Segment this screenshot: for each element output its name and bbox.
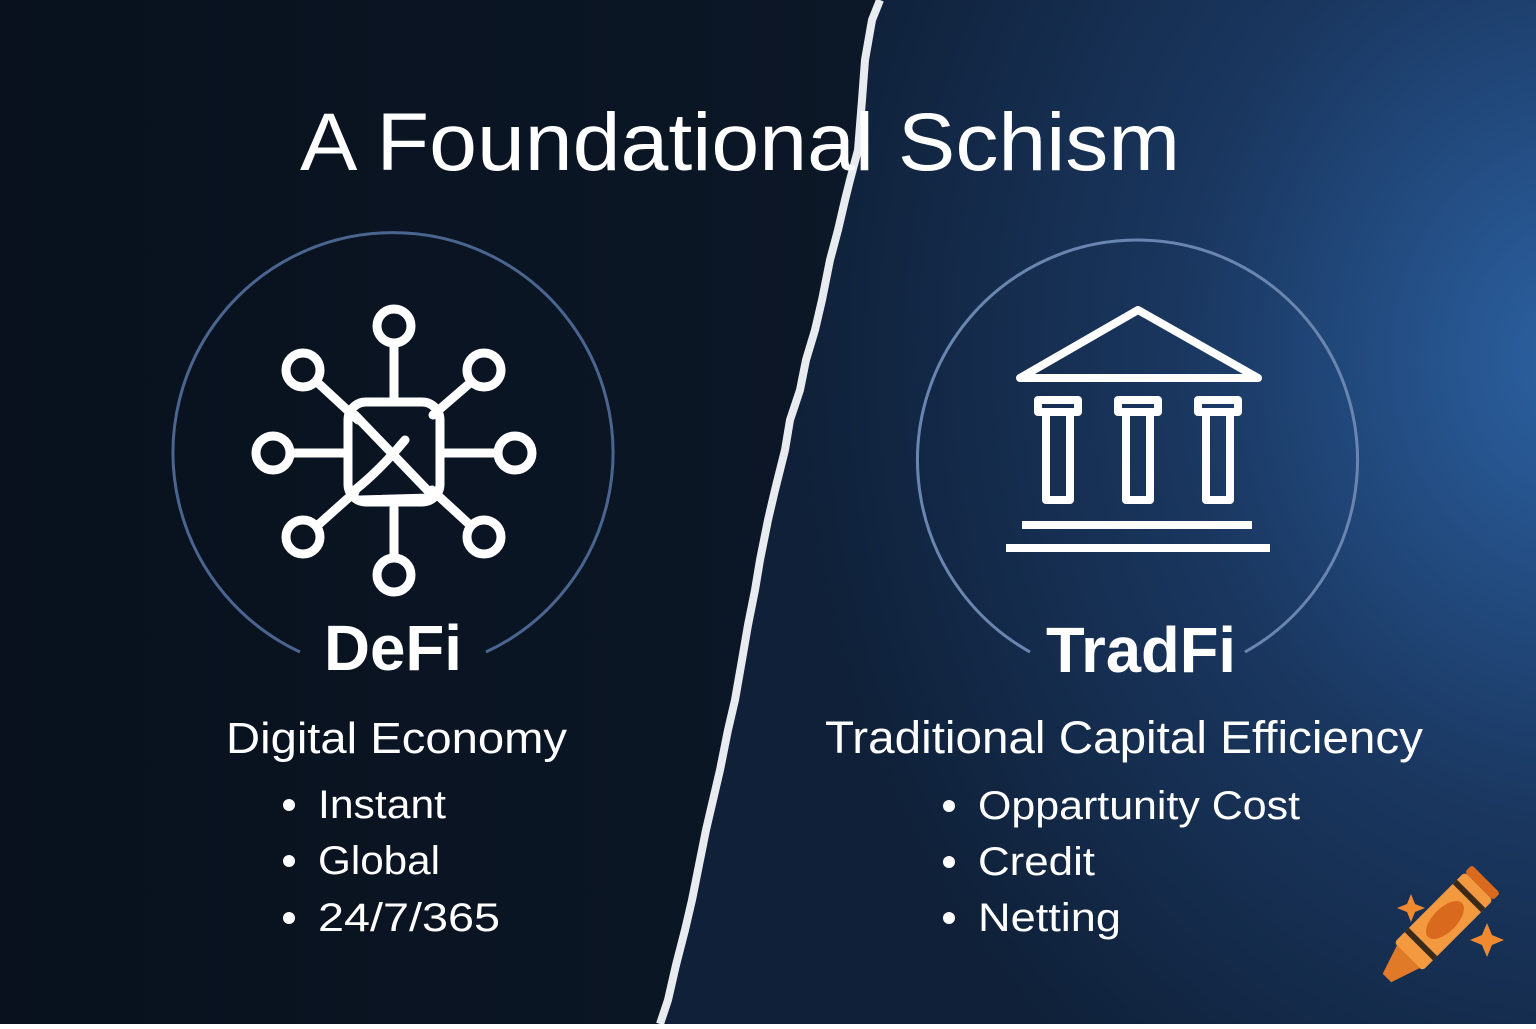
tear line bbox=[660, 0, 880, 1024]
list: DeFi bullets bbox=[283, 783, 500, 940]
list: TradFi bullets: Oppartunity Cost bbox=[978, 784, 1300, 828]
panel: DeFi bbox=[173, 233, 613, 940]
icon: crayon bbox=[1373, 865, 1504, 992]
subheading: Digital Economy: Digital Economy bbox=[226, 714, 567, 763]
circle outline: TradFi bbox=[918, 240, 1357, 652]
background right bbox=[660, 0, 1536, 1024]
list: DeFi bullets: Global bbox=[318, 839, 440, 883]
subheading: Traditional Capital Efficiency: Traditional Capital Efficiency bbox=[825, 712, 1424, 763]
heading: DeFi: DeFi bbox=[324, 612, 462, 684]
list: DeFi bullets: 24/7/365 bbox=[318, 896, 500, 940]
circle outline: DeFi bbox=[173, 233, 613, 652]
list: TradFi bullets: Credit bbox=[978, 840, 1095, 884]
list: TradFi bullets: Netting bbox=[978, 896, 1121, 940]
list: TradFi bullets bbox=[943, 784, 1300, 940]
list: DeFi bullets: Instant bbox=[318, 783, 446, 827]
title: A Foundational Schism bbox=[300, 97, 1180, 188]
icon: network bbox=[256, 309, 532, 592]
icon: bank bbox=[1006, 310, 1270, 548]
panel: TradFi bbox=[825, 240, 1424, 940]
heading: TradFi: TradFi bbox=[1046, 614, 1236, 686]
